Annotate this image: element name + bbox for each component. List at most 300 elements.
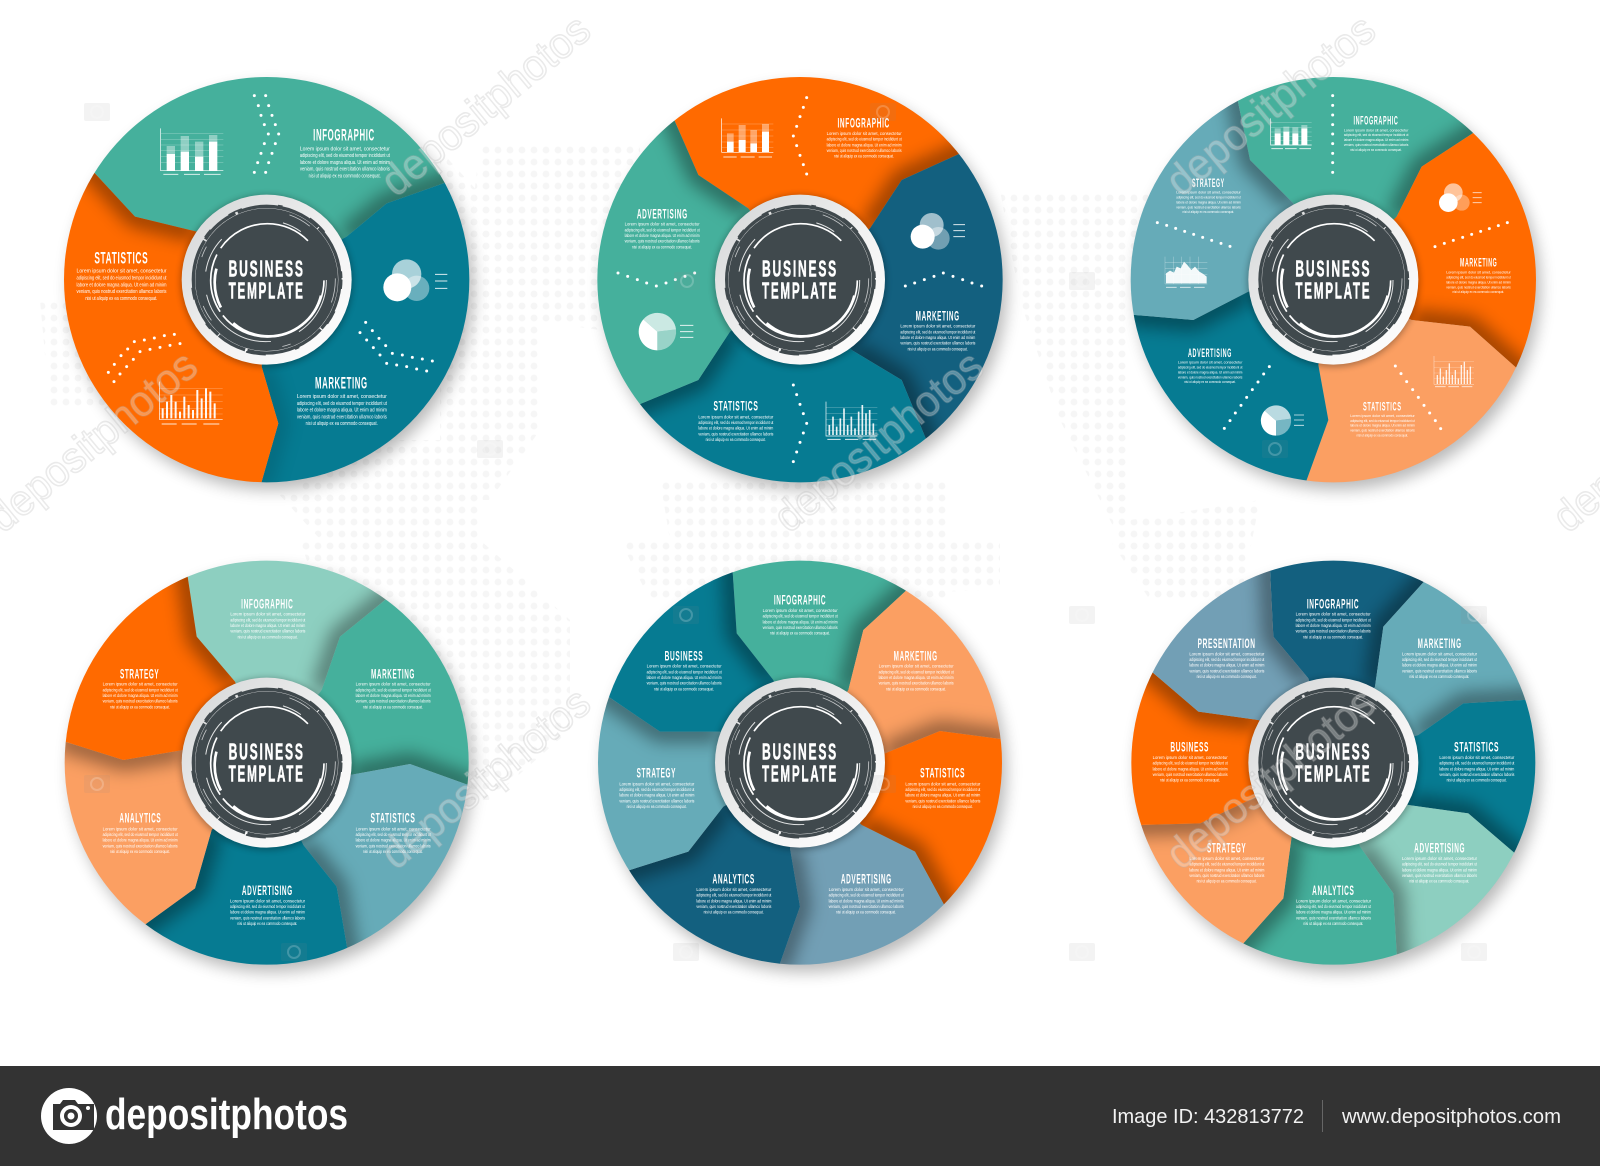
segment: strategy: Lorem ipsum dolor sit amet, consectetur xyxy=(619,781,695,786)
segment: analytics: ANALYTICS xyxy=(119,810,161,826)
icon: camera logo xyxy=(41,1088,97,1144)
segment: analytics: veniam, quis nostrud exercitation ullamco laboris xyxy=(103,843,178,848)
segment: business: nisi ut aliquip ex ea commodo consequat. xyxy=(1160,778,1220,783)
segment: advertising xyxy=(81,763,351,971)
segment: statistics: Lorem ipsum dolor sit amet, consectetur xyxy=(905,781,981,786)
segment: infographic: adipiscing elit, sed do eiusmod tempor incididunt ut xyxy=(1296,617,1371,622)
camera watermarks xyxy=(84,103,1487,961)
segment: analytics: adipiscing elit, sed do eiusmod tempor incididunt ut xyxy=(1296,904,1371,909)
segment: marketing: nisi ut aliquip ex ea commodo consequat. xyxy=(306,421,378,427)
segment: advertising xyxy=(597,120,750,404)
segment: infographic: veniam, quis nostrud exercitation ullamco laboris xyxy=(763,625,838,630)
segment: infographic: adipiscing elit, sed do eiusmod tempor incididunt ut xyxy=(230,617,306,622)
depositphotos text watermarks: depositphotos xyxy=(372,6,600,206)
chart: pie xyxy=(639,313,693,350)
segment: advertising: nisi ut aliquip ex ea commodo consequat. xyxy=(1409,879,1469,884)
segment: infographic: nisi ut aliquip ex ea commodo consequat. xyxy=(770,631,830,636)
segment: advertising: nisi ut aliquip ex ea commodo consequat. xyxy=(1184,379,1236,384)
segment: marketing: Lorem ipsum dolor sit amet, consectetur xyxy=(356,682,431,687)
segment: marketing: labore et dolore magna aliqua. Ut enim ad minim xyxy=(1446,279,1511,284)
segment: infographic: labore et dolore magna aliqua. Ut enim ad minim xyxy=(300,160,390,166)
segment: business xyxy=(592,554,800,763)
segment: marketing: veniam, quis nostrud exercitation ullamco laboris xyxy=(900,341,976,346)
dotted line xyxy=(1156,221,1231,248)
dotted curve xyxy=(616,271,696,287)
segment: strategy: veniam, quis nostrud exercitation ullamco laboris xyxy=(1189,873,1265,878)
hub: BUSINESS xyxy=(1295,256,1371,282)
segment: advertising xyxy=(1125,280,1333,488)
dotted line xyxy=(1394,364,1442,430)
segment: analytics xyxy=(58,740,267,971)
chart: bars xyxy=(161,128,223,174)
chart: venn xyxy=(911,213,965,250)
segment: infographic xyxy=(184,554,441,763)
circle shadow xyxy=(70,86,474,490)
panel: circle 1, three segments xyxy=(58,71,475,490)
chart: dense bars xyxy=(159,382,223,424)
segment: infographic: INFOGRAPHIC xyxy=(1353,115,1398,128)
segment: statistics: Lorem ipsum dolor sit amet, consectetur xyxy=(698,414,774,419)
segment: statistics: veniam, quis nostrud exercitation ullamco laboris xyxy=(1439,772,1515,777)
segment: infographic xyxy=(94,77,445,240)
segment: marketing: labore et dolore magna aliqua. Ut enim ad minim xyxy=(297,408,387,414)
segment: infographic: Lorem ipsum dolor sit amet, consectetur xyxy=(230,612,306,617)
segment: advertising: labore et dolore magna aliqua. Ut enim ad minim xyxy=(230,910,305,915)
segment: advertising: nisi ut aliquip ex ea commodo consequat. xyxy=(836,910,896,915)
segment: marketing: veniam, quis nostrud exercitation ullamco laboris xyxy=(297,414,387,420)
segment: infographic: Lorem ipsum dolor sit amet, consectetur xyxy=(1344,127,1409,132)
segment: infographic: labore et dolore magna aliqua. Ut enim ad minim xyxy=(763,619,838,624)
hub xyxy=(1247,678,1419,850)
logo wordmark: depositphotos xyxy=(105,1090,348,1139)
circle shadow xyxy=(604,569,1006,972)
segment: marketing: Lorem ipsum dolor sit amet, consectetur xyxy=(900,324,976,329)
segment: infographic: nisi ut aliquip ex ea commodo consequat. xyxy=(1350,147,1402,152)
segment: infographic: nisi ut aliquip ex ea commodo consequat. xyxy=(1303,634,1363,639)
segment: strategy: labore et dolore magna aliqua. Ut enim ad minim xyxy=(103,693,178,698)
segment: presentation: veniam, quis nostrud exercitation ullamco laboris xyxy=(1189,668,1265,673)
segment: infographic: adipiscing elit, sed do eiusmod tempor incididunt ut xyxy=(300,153,390,159)
segment: analytics: nisi ut aliquip ex ea commodo consequat. xyxy=(1303,921,1363,926)
segment: advertising: veniam, quis nostrud exercitation ullamco laboris xyxy=(829,904,904,909)
segment: infographic: veniam, quis nostrud exercitation ullamco laboris xyxy=(1344,142,1408,147)
segments group xyxy=(592,554,1008,971)
segment: strategy xyxy=(58,554,267,763)
segment: statistics: nisi ut aliquip ex ea commodo consequat. xyxy=(85,296,158,302)
segment: presentation: Lorem ipsum dolor sit amet, consectetur xyxy=(1189,651,1265,656)
segment: statistics: nisi ut aliquip ex ea commodo consequat. xyxy=(363,849,423,854)
dotted curve xyxy=(792,383,808,463)
segment: marketing: labore et dolore magna aliqua. Ut enim ad minim xyxy=(356,693,431,698)
segment: statistics: STATISTICS xyxy=(713,398,758,414)
segment: strategy xyxy=(1130,100,1294,320)
hub: TEMPLATE xyxy=(762,278,838,304)
segment: business: Lorem ipsum dolor sit amet, consectetur xyxy=(647,664,722,669)
segment: marketing: veniam, quis nostrud exercitation ullamco laboris xyxy=(356,699,431,704)
hub xyxy=(181,678,353,850)
segment: statistics xyxy=(1333,699,1542,876)
segment: statistics: STATISTICS xyxy=(94,249,148,268)
segment: advertising: Lorem ipsum dolor sit amet, consectetur xyxy=(625,222,700,227)
chart: bars xyxy=(722,118,773,157)
segment: statistics xyxy=(800,731,1008,971)
segment: marketing: MARKETING xyxy=(371,665,415,681)
segment: statistics: veniam, quis nostrud exercitation ullamco laboris xyxy=(905,798,981,803)
segment: analytics: Lorem ipsum dolor sit amet, consectetur xyxy=(1296,898,1371,903)
chart: bars xyxy=(1271,118,1312,149)
segment: strategy: STRATEGY xyxy=(1207,840,1246,856)
segment: advertising: adipiscing elit, sed do eiusmod tempor incididunt ut xyxy=(1178,365,1243,370)
depositphotos text watermarks: depositphotos xyxy=(765,342,993,542)
segment: marketing: labore et dolore magna aliqua. Ut enim ad minim xyxy=(900,335,975,340)
segments group xyxy=(1125,71,1542,488)
segment: strategy: nisi ut aliquip ex ea commodo consequat. xyxy=(110,704,170,709)
segment: business: veniam, quis nostrud exercitation ullamco laboris xyxy=(1153,772,1228,777)
segment: strategy: labore et dolore magna aliqua. Ut enim ad minim xyxy=(1176,199,1241,204)
segment: strategy: adipiscing elit, sed do eiusmod tempor incididunt ut xyxy=(1189,862,1265,867)
segment: statistics: labore et dolore magna aliqua. Ut enim ad minim xyxy=(1350,423,1415,428)
segment: business: labore et dolore magna aliqua. Ut enim ad minim xyxy=(647,675,722,680)
segment: advertising: adipiscing elit, sed do eiusmod tempor incididunt ut xyxy=(230,904,305,909)
segment: strategy: labore et dolore magna aliqua. Ut enim ad minim xyxy=(619,793,694,798)
segment: statistics: veniam, quis nostrud exercitation ullamco laboris xyxy=(698,431,774,436)
dotted curve xyxy=(253,94,280,174)
segment: marketing: nisi ut aliquip ex ea commodo consequat. xyxy=(1409,674,1469,679)
dotted curve xyxy=(107,333,181,383)
segment: infographic: nisi ut aliquip ex ea commodo consequat. xyxy=(309,174,381,180)
segment: analytics: labore et dolore magna aliqua. Ut enim ad minim xyxy=(696,898,771,903)
segment: business: BUSINESS xyxy=(665,647,703,663)
segment: advertising: ADVERTISING xyxy=(242,882,293,898)
hub: TEMPLATE xyxy=(1295,761,1371,787)
chart: dense bars xyxy=(826,402,877,439)
segment: statistics: labore et dolore magna aliqua. Ut enim ad minim xyxy=(356,838,431,843)
segment: statistics: adipiscing elit, sed do eiusmod tempor incididunt ut xyxy=(356,832,431,837)
segment: infographic: INFOGRAPHIC xyxy=(313,126,375,145)
hub: BUSINESS xyxy=(229,256,305,282)
dotted curve xyxy=(904,271,983,287)
segment: infographic: Lorem ipsum dolor sit amet, consectetur xyxy=(827,131,902,136)
segment: statistics: STATISTICS xyxy=(1454,739,1499,755)
segment: statistics: veniam, quis nostrud exercitation ullamco laboris xyxy=(77,289,167,295)
hub: TEMPLATE xyxy=(762,761,838,787)
segment: business: adipiscing elit, sed do eiusmod tempor incididunt ut xyxy=(1153,761,1228,766)
segment: infographic: nisi ut aliquip ex ea commodo consequat. xyxy=(834,154,894,159)
segment: marketing xyxy=(1333,554,1542,763)
segment: marketing: MARKETING xyxy=(916,307,960,323)
segment: advertising: adipiscing elit, sed do eiusmod tempor incididunt ut xyxy=(1402,862,1477,867)
depositphotos text watermarks: depositphotos xyxy=(1157,679,1385,879)
dotted world map xyxy=(40,145,1260,800)
segment: advertising: labore et dolore magna aliqua. Ut enim ad minim xyxy=(625,233,700,238)
segment: analytics xyxy=(1219,763,1398,971)
segment: marketing: Lorem ipsum dolor sit amet, consectetur xyxy=(1446,270,1511,275)
segment: analytics: adipiscing elit, sed do eiusmod tempor incididunt ut xyxy=(103,832,178,837)
segment: marketing: MARKETING xyxy=(1418,635,1462,651)
circle shadow xyxy=(603,86,1007,490)
segment: strategy: adipiscing elit, sed do eiusmod tempor incididunt ut xyxy=(619,787,695,792)
segment: infographic: veniam, quis nostrud exercitation ullamco laboris xyxy=(827,148,902,153)
circle shadow xyxy=(1137,569,1540,972)
segment: analytics: ANALYTICS xyxy=(1312,882,1354,898)
segment: marketing xyxy=(260,172,475,488)
segment: statistics: STATISTICS xyxy=(1363,400,1402,413)
segment: presentation: adipiscing elit, sed do eiusmod tempor incididunt ut xyxy=(1189,657,1265,662)
segment: strategy: STRATEGY xyxy=(637,765,676,781)
segment: advertising: nisi ut aliquip ex ea commodo consequat. xyxy=(632,244,692,249)
segment: infographic: nisi ut aliquip ex ea commodo consequat. xyxy=(238,634,298,639)
dotted curve xyxy=(358,321,434,372)
panel: circle 5, seven segments xyxy=(592,554,1008,972)
segment: statistics: labore et dolore magna aliqua. Ut enim ad minim xyxy=(77,282,167,288)
segment: marketing: nisi ut aliquip ex ea commodo consequat. xyxy=(363,704,423,709)
segment: strategy xyxy=(592,685,800,882)
segment: statistics: adipiscing elit, sed do eiusmod tempor incididunt ut xyxy=(905,787,981,792)
hub xyxy=(1247,195,1419,367)
hub xyxy=(714,195,886,367)
segment: marketing: veniam, quis nostrud exercitation ullamco laboris xyxy=(1402,668,1477,673)
segment: strategy: labore et dolore magna aliqua. Ut enim ad minim xyxy=(1189,867,1264,872)
segment: infographic: Lorem ipsum dolor sit amet, consectetur xyxy=(763,608,838,613)
segment: statistics: veniam, quis nostrud exercitation ullamco laboris xyxy=(356,843,431,848)
segment: statistics: veniam, quis nostrud exercitation ullamco laboris xyxy=(1350,428,1415,433)
segment: analytics: nisi ut aliquip ex ea commodo consequat. xyxy=(110,849,170,854)
segment: advertising: Lorem ipsum dolor sit amet, consectetur xyxy=(1178,360,1243,365)
segment: analytics: nisi ut aliquip ex ea commodo consequat. xyxy=(704,910,764,915)
segment: marketing: Lorem ipsum dolor sit amet, consectetur xyxy=(879,664,954,669)
segment: advertising: veniam, quis nostrud exercitation ullamco laboris xyxy=(230,915,305,920)
segment: statistics: nisi ut aliquip ex ea commodo consequat. xyxy=(1447,778,1507,783)
segment: strategy: Lorem ipsum dolor sit amet, consectetur xyxy=(103,682,178,687)
segment: advertising: ADVERTISING xyxy=(1188,347,1232,360)
dotted line xyxy=(1433,221,1509,248)
segment: statistics: labore et dolore magna aliqua. Ut enim ad minim xyxy=(1439,766,1514,771)
segment: marketing: MARKETING xyxy=(894,647,938,663)
segment: marketing: adipiscing elit, sed do eiusmod tempor incididunt ut xyxy=(297,401,387,407)
segment: marketing: labore et dolore magna aliqua. Ut enim ad minim xyxy=(879,675,954,680)
hub: TEMPLATE xyxy=(1295,278,1371,304)
segment: presentation: PRESENTATION xyxy=(1198,635,1256,651)
segment: marketing: nisi ut aliquip ex ea commodo consequat. xyxy=(886,686,946,691)
segment: statistics: nisi ut aliquip ex ea commodo consequat. xyxy=(1357,432,1408,437)
segment: marketing: MARKETING xyxy=(1460,257,1497,270)
segment: advertising: labore et dolore magna aliqua. Ut enim ad minim xyxy=(1402,867,1477,872)
segment: marketing: adipiscing elit, sed do eiusmod tempor incididunt ut xyxy=(1402,657,1477,662)
segment: statistics xyxy=(267,763,475,971)
segment: statistics: STATISTICS xyxy=(370,810,415,826)
depositphotos text watermarks: depositphotos xyxy=(1157,6,1385,206)
hub: BUSINESS xyxy=(229,739,305,765)
segment: infographic: INFOGRAPHIC xyxy=(1307,595,1359,611)
segment: analytics: veniam, quis nostrud exercitation ullamco laboris xyxy=(1296,915,1371,920)
segment: marketing: labore et dolore magna aliqua. Ut enim ad minim xyxy=(1402,663,1477,668)
segment: advertising: labore et dolore magna aliqua. Ut enim ad minim xyxy=(829,898,904,903)
segment: advertising: adipiscing elit, sed do eiusmod tempor incididunt ut xyxy=(829,893,904,898)
segment: analytics: veniam, quis nostrud exercitation ullamco laboris xyxy=(696,904,772,909)
segment: analytics: Lorem ipsum dolor sit amet, consectetur xyxy=(103,826,178,831)
segment: statistics: Lorem ipsum dolor sit amet, consectetur xyxy=(77,269,167,275)
segment: strategy: STRATEGY xyxy=(1192,177,1225,190)
segment: infographic: labore et dolore magna aliqua. Ut enim ad minim xyxy=(1296,623,1371,628)
segment: analytics: labore et dolore magna aliqua. Ut enim ad minim xyxy=(103,838,178,843)
segment: business: labore et dolore magna aliqua. Ut enim ad minim xyxy=(1153,766,1228,771)
chart: venn xyxy=(383,259,447,301)
segment: statistics: adipiscing elit, sed do eiusmod tempor incididunt ut xyxy=(1439,761,1515,766)
hub xyxy=(181,195,353,367)
segment: infographic: veniam, quis nostrud exercitation ullamco laboris xyxy=(1296,629,1371,634)
segment: statistics: adipiscing elit, sed do eiusmod tempor incididunt ut xyxy=(698,420,774,425)
segment: statistics: Lorem ipsum dolor sit amet, consectetur xyxy=(1439,755,1515,760)
segment: strategy: veniam, quis nostrud exercitation ullamco laboris xyxy=(619,798,695,803)
segment: advertising: ADVERTISING xyxy=(1414,840,1465,856)
dotted curve xyxy=(792,96,808,175)
segment: statistics xyxy=(592,280,946,488)
segment: infographic: adipiscing elit, sed do eiusmod tempor incididunt ut xyxy=(827,137,902,142)
segment: marketing xyxy=(1394,133,1536,368)
hub: BUSINESS xyxy=(762,256,838,282)
website: www.depositphotos.com xyxy=(1341,1106,1561,1128)
segment: presentation: nisi ut aliquip ex ea commodo consequat. xyxy=(1197,674,1257,679)
segment: marketing xyxy=(267,554,475,787)
segment: infographic: labore et dolore magna aliqua. Ut enim ad minim xyxy=(1344,137,1409,142)
segment: marketing: adipiscing elit, sed do eiusmod tempor incididunt ut xyxy=(1446,275,1511,280)
hub: TEMPLATE xyxy=(229,278,305,304)
segment: statistics xyxy=(64,173,278,482)
segment: marketing: nisi ut aliquip ex ea commodo consequat. xyxy=(908,346,968,351)
segment: infographic: veniam, quis nostrud exercitation ullamco laboris xyxy=(300,167,390,173)
segment: advertising: veniam, quis nostrud exercitation ullamco laboris xyxy=(625,239,700,244)
segment: advertising: nisi ut aliquip ex ea commodo consequat. xyxy=(237,921,297,926)
segment: strategy: Lorem ipsum dolor sit amet, consectetur xyxy=(1189,856,1265,861)
segment: business: adipiscing elit, sed do eiusmod tempor incididunt ut xyxy=(647,669,722,674)
segment: marketing: nisi ut aliquip ex ea commodo consequat. xyxy=(1453,289,1504,294)
segment: business: Lorem ipsum dolor sit amet, consectetur xyxy=(1153,755,1228,760)
segment: infographic: INFOGRAPHIC xyxy=(774,592,826,608)
segment: strategy: Lorem ipsum dolor sit amet, consectetur xyxy=(1176,190,1241,195)
chart: pie xyxy=(1261,405,1304,436)
circle shadow xyxy=(1136,86,1540,490)
hub xyxy=(714,678,886,850)
segment: infographic: labore et dolore magna aliqua. Ut enim ad minim xyxy=(230,623,305,628)
segment: presentation xyxy=(1125,554,1333,763)
segment: strategy: adipiscing elit, sed do eiusmod tempor incididunt ut xyxy=(1176,195,1241,200)
circle shadow xyxy=(70,569,473,972)
footer bar xyxy=(0,1066,1600,1166)
segment: infographic: INFOGRAPHIC xyxy=(241,595,293,611)
segment: marketing xyxy=(850,154,1003,439)
segment: infographic xyxy=(674,77,959,230)
hub: BUSINESS xyxy=(762,739,838,765)
segment: marketing: adipiscing elit, sed do eiusmod tempor incididunt ut xyxy=(356,687,431,692)
segment: presentation: labore et dolore magna aliqua. Ut enim ad minim xyxy=(1189,663,1264,668)
segment: advertising: ADVERTISING xyxy=(637,205,688,221)
segment: analytics: labore et dolore magna aliqua. Ut enim ad minim xyxy=(1296,910,1371,915)
segment: advertising: labore et dolore magna aliqua. Ut enim ad minim xyxy=(1178,369,1243,374)
segment: advertising: veniam, quis nostrud exercitation ullamco laboris xyxy=(1178,374,1242,379)
segments group xyxy=(1125,554,1542,971)
segment: infographic: veniam, quis nostrud exercitation ullamco laboris xyxy=(230,629,306,634)
chart: venn xyxy=(1439,183,1482,212)
segment: statistics: Lorem ipsum dolor sit amet, consectetur xyxy=(356,826,431,831)
segment: analytics: Lorem ipsum dolor sit amet, consectetur xyxy=(696,887,772,892)
segment: marketing: adipiscing elit, sed do eiusmod tempor incididunt ut xyxy=(900,329,976,334)
segment: strategy: nisi ut aliquip ex ea commodo consequat. xyxy=(1197,879,1257,884)
segment: advertising: adipiscing elit, sed do eiusmod tempor incididunt ut xyxy=(625,227,700,232)
segment: strategy: veniam, quis nostrud exercitation ullamco laboris xyxy=(1176,204,1241,209)
segment: infographic xyxy=(1238,77,1474,220)
segment: advertising: Lorem ipsum dolor sit amet, consectetur xyxy=(230,898,305,903)
segment: strategy: adipiscing elit, sed do eiusmod tempor incididunt ut xyxy=(103,687,178,692)
segment: statistics: labore et dolore magna aliqua. Ut enim ad minim xyxy=(698,426,773,431)
panel: circle 2, four segments xyxy=(592,71,1008,490)
segment: statistics xyxy=(1306,318,1516,482)
segment: statistics: STATISTICS xyxy=(920,765,965,781)
dotted line xyxy=(1223,365,1271,430)
segment: strategy: veniam, quis nostrud exercitation ullamco laboris xyxy=(103,699,178,704)
segment: infographic: Lorem ipsum dolor sit amet, consectetur xyxy=(300,146,390,152)
segment: strategy xyxy=(1125,763,1333,971)
segment: analytics xyxy=(592,763,800,971)
segment: strategy: nisi ut aliquip ex ea commodo consequat. xyxy=(1183,209,1234,214)
segment: infographic xyxy=(1269,554,1449,763)
segments group xyxy=(592,71,1008,488)
image id: Image ID: 432813772 xyxy=(1112,1106,1304,1128)
segment: infographic: adipiscing elit, sed do eiusmod tempor incididunt ut xyxy=(763,614,838,619)
segment: business: BUSINESS xyxy=(1170,739,1209,755)
segment: marketing: MARKETING xyxy=(315,374,368,393)
panel: circle 3, five segments xyxy=(1125,71,1542,490)
segment: statistics: adipiscing elit, sed do eiusmod tempor incididunt ut xyxy=(77,275,167,281)
segment: strategy: nisi ut aliquip ex ea commodo consequat. xyxy=(627,804,687,809)
segment: strategy: STRATEGY xyxy=(120,665,159,681)
depositphotos text watermarks: depositphotos xyxy=(372,679,600,879)
segment: marketing xyxy=(800,554,1008,763)
segment: advertising: ADVERTISING xyxy=(841,871,892,887)
segment: business: nisi ut aliquip ex ea commodo consequat. xyxy=(654,686,714,691)
segment: statistics: Lorem ipsum dolor sit amet, consectetur xyxy=(1350,413,1415,418)
segment: analytics: adipiscing elit, sed do eiusmod tempor incididunt ut xyxy=(696,893,772,898)
segments group xyxy=(58,554,475,971)
segment: advertising xyxy=(1333,763,1542,971)
segment: infographic: adipiscing elit, sed do eiusmod tempor incididunt ut xyxy=(1344,132,1409,137)
segments group xyxy=(58,71,475,488)
segment: infographic: INFOGRAPHIC xyxy=(837,115,890,131)
chart: dense bars xyxy=(1434,356,1474,387)
segment: marketing: veniam, quis nostrud exercitation ullamco laboris xyxy=(1446,284,1511,289)
segment: marketing: Lorem ipsum dolor sit amet, consectetur xyxy=(297,394,387,400)
dotted line xyxy=(1331,94,1334,174)
segment: advertising: Lorem ipsum dolor sit amet, consectetur xyxy=(1402,856,1477,861)
segment: statistics: labore et dolore magna aliqua. Ut enim ad minim xyxy=(905,793,980,798)
segment: marketing: adipiscing elit, sed do eiusmod tempor incididunt ut xyxy=(879,669,954,674)
segment: advertising: Lorem ipsum dolor sit amet, consectetur xyxy=(829,887,904,892)
depositphotos text watermarks xyxy=(0,6,1600,879)
segment: business: veniam, quis nostrud exercitation ullamco laboris xyxy=(647,681,722,686)
segment: marketing: veniam, quis nostrud exercitation ullamco laboris xyxy=(879,681,954,686)
segment: statistics: nisi ut aliquip ex ea commodo consequat. xyxy=(913,804,973,809)
segment: statistics: adipiscing elit, sed do eiusmod tempor incididunt ut xyxy=(1350,418,1415,423)
hub: BUSINESS xyxy=(1295,739,1371,765)
panel: circle 6, eight segments xyxy=(1125,554,1542,972)
segment: business xyxy=(1125,649,1333,825)
segment: advertising xyxy=(777,763,980,971)
segment: advertising: veniam, quis nostrud exercitation ullamco laboris xyxy=(1402,873,1477,878)
chart: area xyxy=(1165,257,1207,287)
panel: circle 4, six segments xyxy=(58,554,475,972)
segment: marketing: Lorem ipsum dolor sit amet, consectetur xyxy=(1402,651,1477,656)
segment: analytics: ANALYTICS xyxy=(712,871,755,887)
hub: TEMPLATE xyxy=(229,761,305,787)
